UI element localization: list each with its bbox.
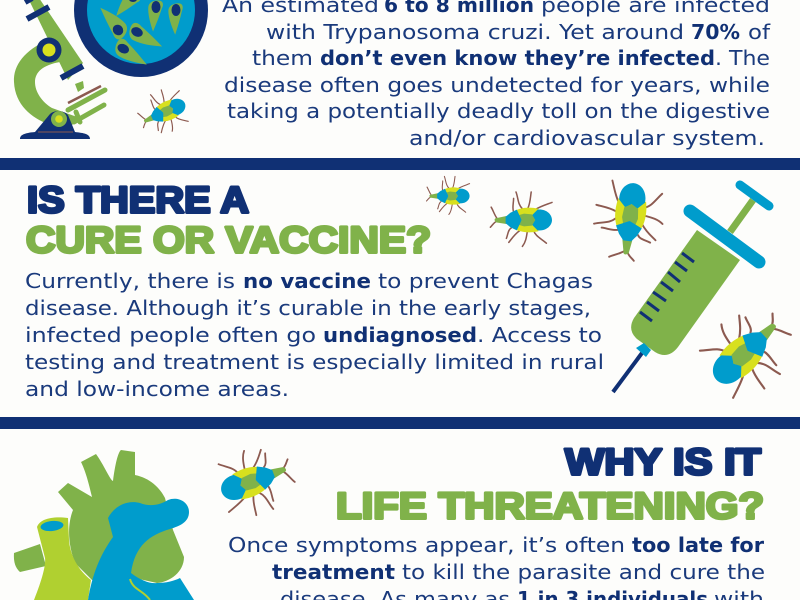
text block: vaccine and cure: undiagnosed bbox=[323, 323, 477, 347]
text block: infection statistics: 70% bbox=[691, 20, 740, 44]
text block: late treatment: treatment bbox=[272, 560, 395, 584]
icon: large bug bbox=[590, 179, 667, 264]
text block: infection statistics: and/or cardiovascular system. bbox=[409, 126, 765, 150]
icon: bug by syringe bbox=[691, 294, 800, 408]
text block: vaccine and cure: disease. Although it’s curable in the early stages, bbox=[25, 296, 591, 320]
text block: vaccine and cure bbox=[25, 269, 604, 401]
heading: why is it life threatening: WHY IS IT bbox=[565, 442, 761, 482]
heading: is there a cure or vaccine: IS THERE A bbox=[27, 180, 249, 220]
heading: is there a cure or vaccine: CURE OR VACCINE? bbox=[26, 220, 431, 260]
text block: late treatment bbox=[228, 533, 765, 600]
section divider middle bbox=[0, 417, 800, 429]
text block: late treatment: too late for bbox=[632, 533, 765, 557]
text block: infection statistics: with Trypanosoma cruzi. Yet around bbox=[266, 20, 684, 44]
icon: bug beside microscope bbox=[132, 83, 193, 141]
text block: infection statistics: disease often goes undetected for years, while bbox=[224, 73, 770, 97]
heading: why is it life threatening bbox=[336, 442, 764, 526]
icon: magnified parasites bbox=[74, 0, 208, 77]
icon: heart bbox=[14, 450, 194, 600]
text block: vaccine and cure: Currently, there is bbox=[25, 269, 235, 293]
text block: vaccine and cure: and low-income areas. bbox=[25, 377, 289, 401]
text block: vaccine and cure: testing and treatment is especially limited in rural bbox=[25, 350, 604, 374]
text block: vaccine and cure: . Access to bbox=[477, 323, 602, 347]
text block: infection statistics: don’t even know they’re infected bbox=[320, 46, 715, 70]
text block: infection statistics: them bbox=[252, 46, 313, 70]
text block: vaccine and cure: infected people often go bbox=[25, 323, 316, 347]
text block: infection statistics: taking a potentially deadly toll on the digestive bbox=[227, 99, 770, 123]
text block: late treatment: Once symptoms appear, it’s often bbox=[228, 533, 625, 557]
text block: late treatment: to kill the parasite and cure the bbox=[402, 560, 765, 584]
icon: medium bug bbox=[490, 192, 552, 246]
heading: why is it life threatening: LIFE THREATENING? bbox=[336, 486, 764, 526]
icon: bug by heart bbox=[211, 438, 302, 524]
icon: small bug bbox=[426, 176, 470, 214]
text block: vaccine and cure: no vaccine bbox=[243, 269, 371, 293]
text block: infection statistics: . The bbox=[715, 46, 770, 70]
icon: syringe bbox=[613, 185, 769, 392]
heading: is there a cure or vaccine bbox=[26, 180, 431, 260]
text block: infection statistics bbox=[222, 0, 771, 150]
icon: microscope bbox=[14, 0, 105, 139]
section divider top bbox=[0, 158, 800, 170]
text block: infection statistics: of bbox=[748, 20, 771, 44]
text block: vaccine and cure: to prevent Chagas bbox=[378, 269, 593, 293]
